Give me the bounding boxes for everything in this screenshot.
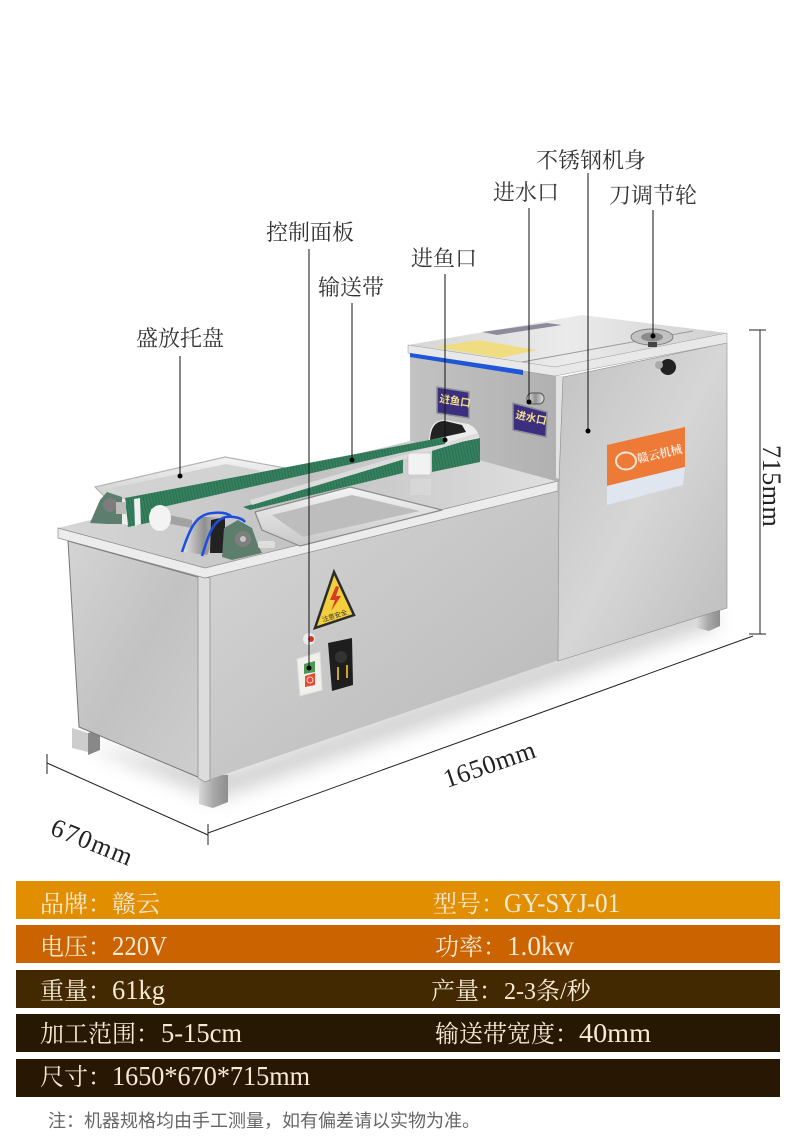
spec row: voltage and power (16, 925, 780, 963)
worktop surface (58, 441, 558, 568)
top sticker yellow (435, 340, 537, 358)
spec row: voltage and power: 1.0kw (507, 931, 575, 961)
white belt guide roller (408, 453, 431, 495)
spec row: voltage and power: 电压： (40, 934, 112, 961)
label: 输送带: 输送带 (318, 275, 384, 300)
label: 盛放托盘 (136, 326, 224, 478)
floor shadow (85, 600, 720, 800)
cabinet left side panel (68, 541, 205, 780)
dimension: width 670mm: 670mm (47, 813, 138, 872)
spec row: processing range and belt width: 加工范围： (40, 1021, 160, 1048)
fish inlet plate: 进鱼口 (439, 392, 472, 410)
water inlet plate (513, 403, 548, 437)
right cabinet block (558, 343, 727, 661)
spec row: dimensions (16, 1059, 780, 1097)
steel roller with white disk (149, 505, 227, 555)
label: 进鱼口 (411, 246, 477, 442)
dimension: width 670mm (47, 754, 208, 872)
dimension: height 715mm: 715mm (757, 445, 786, 527)
label: 刀调节轮 (609, 183, 697, 338)
spec row: weight and output: 2-3条/秒 (504, 978, 592, 1005)
dimension: length 1650mm: 1650mm (440, 735, 540, 794)
spec row: processing range and belt width: 40mm (579, 1018, 651, 1048)
spec row: brand and model: GY-SYJ-01 (504, 888, 620, 918)
label: 盛放托盘: 盛放托盘 (136, 326, 224, 351)
blue strip (410, 353, 523, 375)
spec row: voltage and power: 功率： (435, 934, 507, 961)
indicator light (303, 633, 315, 645)
label: 进水口: 进水口 (493, 180, 559, 205)
spec row: weight and output (16, 970, 780, 1008)
worktop edge (58, 481, 558, 578)
company logo sign (607, 427, 685, 505)
spec row: brand and model: 品牌：赣云 (40, 891, 160, 918)
label: 输送带 (318, 275, 384, 462)
machine illustration (58, 315, 727, 808)
cabinet front panel (205, 491, 559, 781)
water inlet nozzle (527, 393, 544, 404)
spec row: brand and model: 型号： (433, 891, 505, 918)
label: 刀调节轮: 刀调节轮 (609, 183, 697, 208)
spec row: processing range and belt width: 输送带宽度： (435, 1021, 579, 1048)
spec row: weight and output: 产量： (431, 978, 503, 1005)
spec row: processing range and belt width: 5-15cm (161, 1018, 242, 1048)
footnote: 注：机器规格均由手工测量，如有偏差请以实物为准。 (48, 1111, 480, 1131)
warning triangle: 注意安全 (321, 607, 349, 624)
blade adjusting wheel (631, 329, 673, 347)
spec row: voltage and power: 220V (112, 931, 167, 961)
spec row: weight and output: 61kg (112, 975, 165, 1005)
label: 进水口 (493, 180, 559, 404)
speed controller panel (328, 638, 353, 691)
fish inlet opening (429, 420, 480, 458)
label: 控制面板 (266, 220, 354, 670)
blue wires (182, 513, 245, 556)
fish inlet plate (437, 387, 472, 418)
spec row: processing range and belt width (16, 1014, 780, 1052)
housing top plate (408, 315, 727, 367)
dimension: length 1650mm (208, 636, 753, 833)
label: 不锈钢机身: 不锈钢机身 (536, 148, 646, 173)
machine legs (72, 605, 720, 808)
spec row: dimensions: 尺寸： (40, 1064, 112, 1091)
warning triangle (315, 572, 354, 628)
company logo sign: 赣云机械 (636, 442, 684, 466)
left bearing block (90, 492, 126, 524)
spec row: weight and output: 重量： (40, 978, 112, 1005)
water inlet plate: 进水口 (514, 408, 548, 427)
black locking knob (655, 359, 676, 375)
green conveyor belt (118, 433, 480, 527)
label: 进鱼口: 进鱼口 (411, 246, 477, 271)
front tray (255, 487, 442, 546)
label: 控制面板: 控制面板 (266, 220, 354, 245)
right bearing block (210, 517, 275, 560)
start stop button box (297, 652, 322, 696)
rear tray (95, 457, 285, 505)
top sticker purple (482, 323, 562, 335)
spec row: dimensions: 1650*670*715mm (112, 1061, 310, 1091)
label: 不锈钢机身 (536, 148, 646, 434)
spec row: brand and model (16, 881, 780, 919)
upper feed housing face (410, 352, 563, 482)
